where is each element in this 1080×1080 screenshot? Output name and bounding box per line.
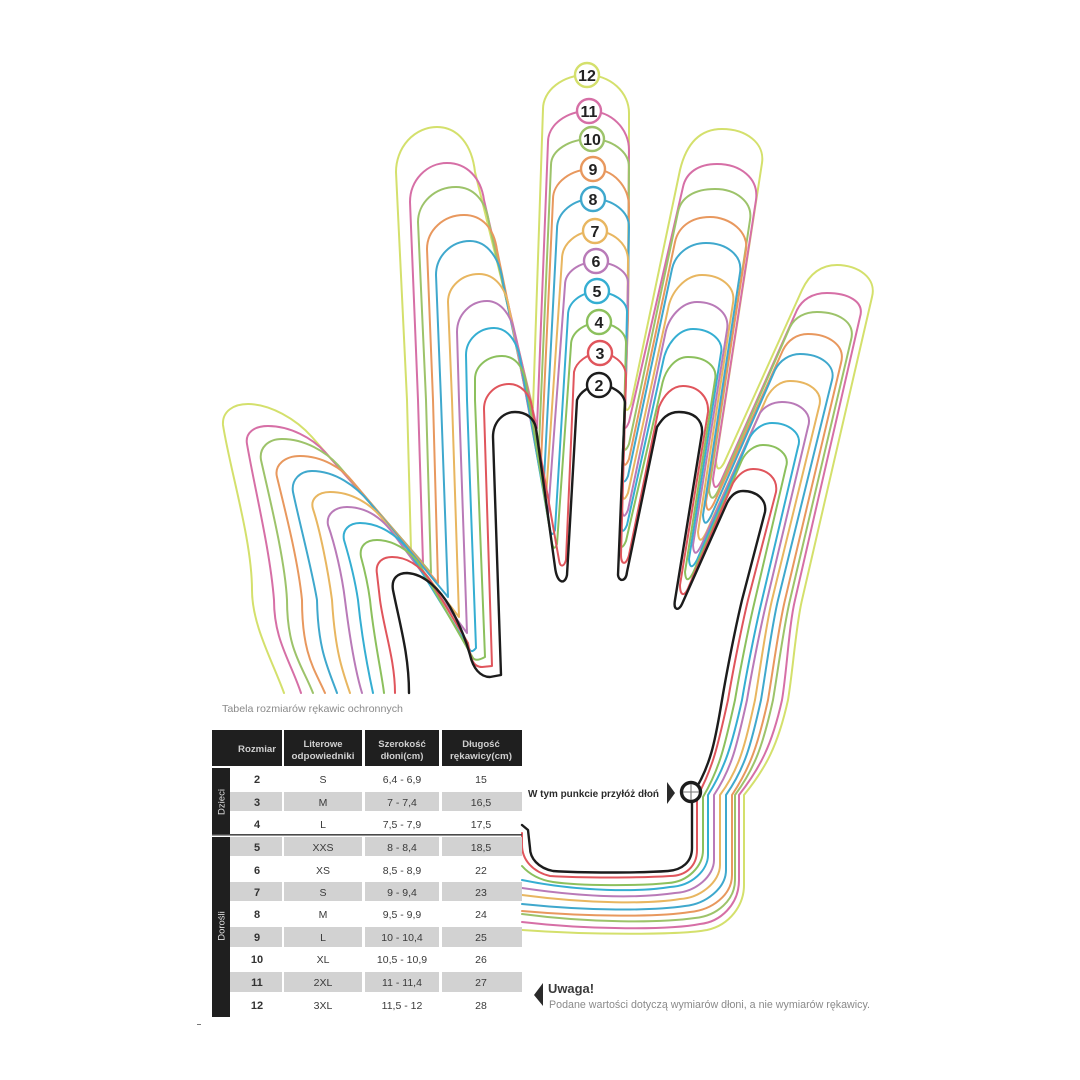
outline: size 8 (293, 199, 833, 910)
row: size 6: XS (316, 865, 330, 877)
row: size 2: 2 (254, 774, 260, 786)
row: size 8: 24 (475, 909, 487, 921)
size marker: 2: 2 (595, 378, 604, 395)
row: size 4: L (320, 819, 326, 831)
row: size 5 (230, 837, 522, 856)
row: size 4 (254, 819, 491, 831)
row: size 6: 6 (254, 865, 260, 877)
row: size 5: 18,5 (471, 842, 491, 854)
row: size 11 (230, 972, 522, 992)
row: size 5: XXS (312, 842, 334, 854)
row: size 11: 2XL (314, 977, 332, 989)
row: size 12: 11,5 - 12 (382, 1000, 422, 1012)
row: size 3: 3 (254, 797, 260, 809)
palm placement instruction: W tym punkcie przyłóż dłoń (528, 789, 659, 800)
outline: size 3 (377, 353, 776, 878)
row: size 2 (254, 774, 487, 786)
table header: odpowiedniki (292, 751, 354, 762)
row: size 12: 12 (251, 1000, 263, 1012)
row: size 4: 7,5 - 7,9 (383, 819, 421, 831)
row: size 9: 25 (475, 932, 487, 944)
table header: dłoni(cm) (381, 751, 423, 762)
outline: size 11 (247, 111, 861, 928)
row: size 10 (251, 954, 487, 966)
table header: Literowe (303, 739, 343, 750)
row: size 10: 26 (475, 954, 487, 966)
hand outlines for all sizes (223, 75, 873, 934)
size marker: 8 (581, 187, 605, 211)
row: size 8 (254, 909, 487, 921)
outline: size 12 (223, 75, 873, 934)
row: size 9: 10 - 10,4 (381, 932, 423, 944)
row: size 6: 8,5 - 8,9 (383, 865, 421, 877)
side label: Dzieci (212, 768, 230, 834)
warning note: Podane wartości dotyczą wymiarów dłoni, a nie wymiarów rękawicy. (549, 999, 870, 1011)
row: size 9 (230, 927, 522, 947)
row: size 2: S (319, 774, 327, 786)
table header: Rozmiar (238, 744, 276, 755)
outline: size 9 (277, 169, 842, 916)
row: size 7: 9 - 9,4 (387, 887, 417, 899)
row: size 6 (254, 865, 487, 877)
table header: rękawicy(cm) (450, 751, 512, 762)
row: size 8: M (319, 909, 327, 921)
table caption: Tabela rozmiarów rękawic ochronnych (222, 703, 403, 715)
row: size 8: 9,5 - 9,9 (383, 909, 421, 921)
row: size 5: 8 - 8,4 (387, 842, 417, 854)
table header: Szerokość (378, 739, 426, 750)
size marker: 4: 4 (595, 315, 604, 332)
row: size 2: 6,4 - 6,9 (383, 774, 421, 786)
row: size 10: XL (317, 954, 330, 966)
divider between children and adults (212, 834, 522, 836)
outline: size 2 (393, 385, 765, 872)
size marker: 9 (581, 157, 605, 181)
row: size 5: 5 (254, 842, 260, 854)
size marker: 7: 7 (591, 224, 600, 241)
row: size 11: 27 (475, 977, 487, 989)
size marker: 3: 3 (596, 346, 605, 363)
arrow: warning marker (534, 983, 543, 1006)
side label: Dzieci: Dzieci (216, 789, 228, 815)
size marker: 6: 6 (592, 254, 601, 271)
outline: size 6 (328, 262, 809, 896)
row: size 3: 16,5 (471, 797, 491, 809)
row: size 11: 11 (251, 977, 263, 989)
size marker: 5: 5 (593, 284, 602, 301)
size marker: 10: 10 (583, 132, 601, 149)
row: size 7: 7 (254, 887, 260, 899)
row: size 7 (230, 882, 522, 901)
row: size 12: 28 (475, 1000, 487, 1012)
row: size 7: 23 (475, 887, 487, 899)
size marker: 3 (588, 341, 612, 365)
row: size 7: S (319, 887, 327, 899)
size marker: 6 (584, 249, 608, 273)
row: size 12: 3XL (314, 1000, 332, 1012)
row: size 10: 10 (251, 954, 263, 966)
outline: size 7 (312, 231, 820, 902)
size marker: 10 (580, 127, 604, 151)
size marker: 11: 11 (581, 104, 598, 121)
row: size 3: M (319, 797, 327, 809)
row: size 3: 7 - 7,4 (387, 797, 417, 809)
row: size 3 (230, 792, 522, 811)
row: size 11: 11 - 11,4 (382, 977, 422, 989)
row: size 10: 10,5 - 10,9 (377, 954, 427, 966)
size marker: 8: 8 (589, 192, 598, 209)
outline: size 5 (344, 292, 799, 890)
size marker: 2 (587, 373, 611, 397)
size table (212, 730, 522, 1017)
row: size 4: 17,5 (471, 819, 491, 831)
row: size 4: 4 (254, 819, 261, 831)
side label: Dorośli (212, 837, 230, 1017)
size marker: 7 (583, 219, 607, 243)
row: size 2: 15 (475, 774, 487, 786)
row: size 8: 8 (254, 909, 260, 921)
table header: Długość (462, 739, 500, 750)
size marker: 12: 12 (578, 68, 596, 85)
size marker: 11 (577, 99, 601, 123)
warning heading: Uwaga! (548, 981, 594, 996)
table header (212, 730, 522, 766)
row: size 6: 22 (475, 865, 487, 877)
size marker: 5 (585, 279, 609, 303)
icon: placement target (682, 782, 700, 802)
row: size 9: 9 (254, 932, 260, 944)
size marker: 12 (575, 63, 599, 87)
side label: Dorośli: Dorośli (216, 911, 228, 941)
outline: size 10 (261, 139, 852, 921)
arrow: points to placement target (667, 782, 675, 804)
size marker: 9: 9 (589, 162, 598, 179)
size marker: 4 (587, 310, 611, 334)
row: size 12 (251, 1000, 487, 1012)
outline: size 4 (361, 323, 787, 885)
row: size 9: L (320, 932, 326, 944)
